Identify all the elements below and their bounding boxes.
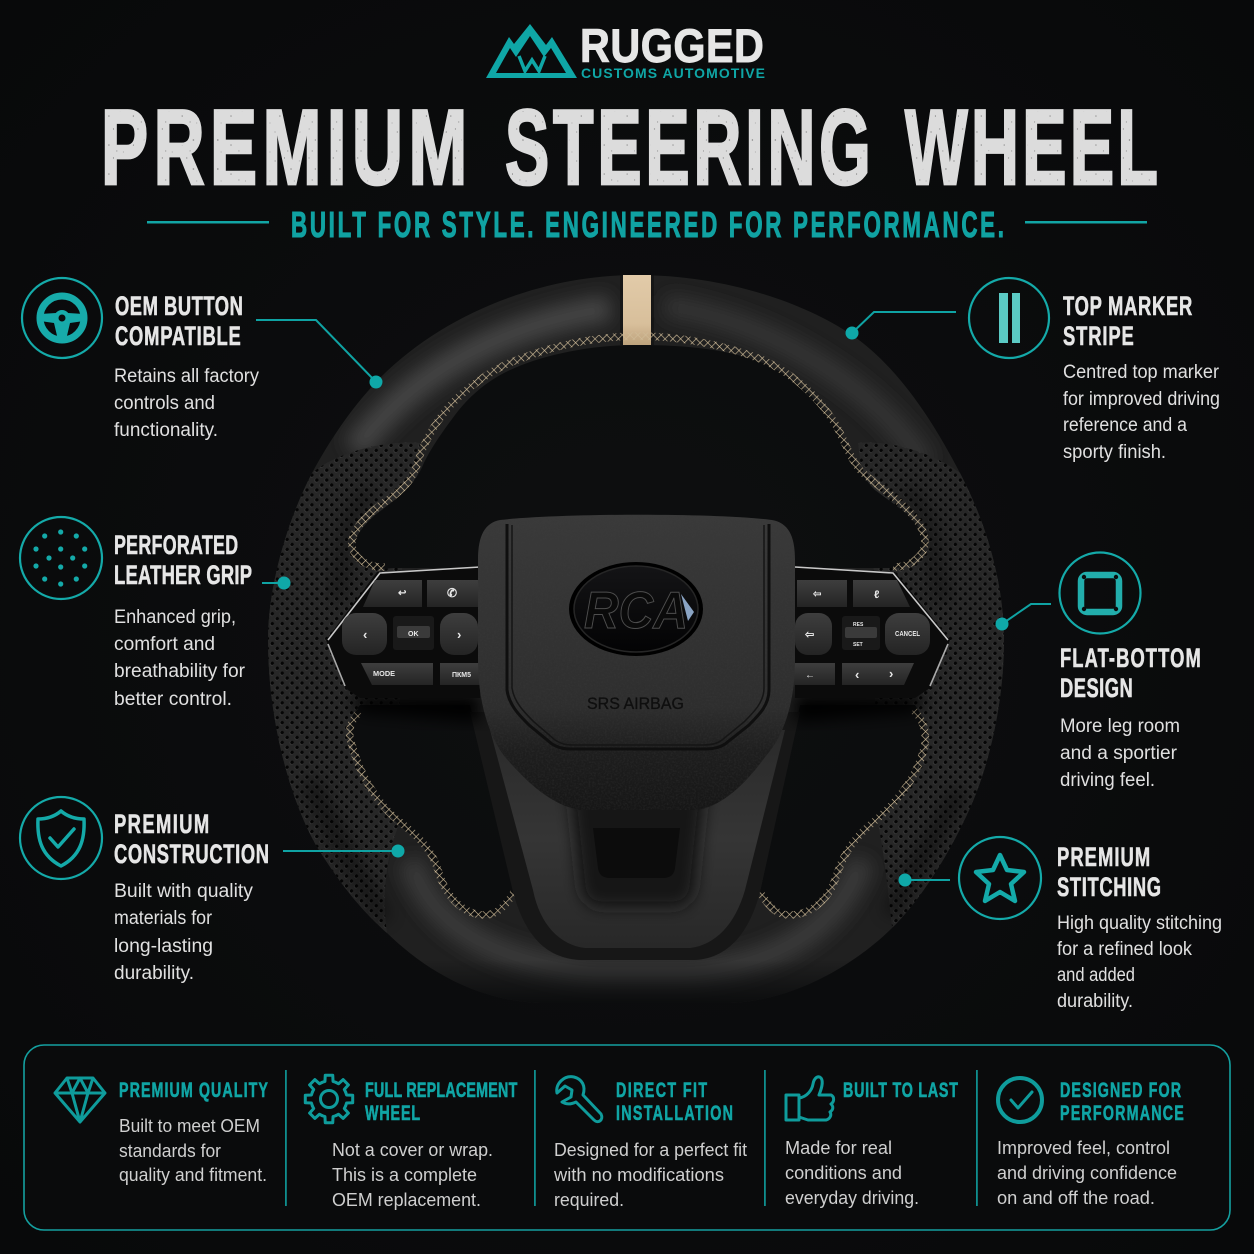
description: Not a cover or wrap. <box>332 1139 493 1160</box>
icon: flat-bottom square <box>1060 552 1140 634</box>
right button pod: RES <box>853 622 864 628</box>
description: on and off the road. <box>997 1187 1155 1208</box>
description <box>119 1115 267 1185</box>
heading: TOP MARKER <box>1063 290 1192 321</box>
benefit: full replacement wheel <box>305 1075 517 1210</box>
benefit: designed for performance <box>997 1078 1184 1208</box>
callout: OEM button compatible <box>22 278 382 441</box>
heading: PERFORMANCE <box>1060 1101 1184 1125</box>
right button pod: CANCEL <box>895 631 921 638</box>
description: Built with quality <box>114 881 254 902</box>
heading: PERFORATED <box>114 529 238 560</box>
heading: BUILT TO LAST <box>843 1078 958 1102</box>
heading: FLAT-BOTTOM <box>1060 642 1201 673</box>
heading <box>1060 1078 1184 1125</box>
description <box>1060 716 1180 791</box>
heading: DESIGNED FOR <box>1060 1078 1181 1102</box>
description: durability. <box>1057 991 1133 1012</box>
icon: wrench <box>557 1077 602 1122</box>
description: breathability for <box>114 661 246 682</box>
SRS airbag marking: SRS AIRBAG <box>587 694 684 713</box>
callout: premium stitching <box>898 837 1222 1012</box>
description: This is a complete <box>332 1164 477 1185</box>
description <box>332 1139 493 1210</box>
rim leather shading <box>250 306 1020 1007</box>
perforated right grip <box>859 442 1004 926</box>
description: conditions and <box>785 1162 902 1183</box>
description <box>114 881 254 984</box>
heading <box>1057 841 1161 902</box>
heading: PREMIUM QUALITY <box>119 1078 268 1102</box>
benefit: premium quality <box>55 1078 268 1185</box>
heading: STITCHING <box>1057 871 1161 902</box>
heading: FULL REPLACEMENT <box>365 1078 517 1102</box>
right button pod: › <box>889 666 893 681</box>
logo: Rugged Customs Automotive: RUGGED <box>580 21 764 73</box>
heading: CONSTRUCTION <box>114 838 269 869</box>
description: Retains all factory <box>114 366 259 387</box>
left button pod <box>326 566 481 722</box>
stitching <box>350 336 925 915</box>
description: Made for real <box>785 1137 892 1158</box>
logo: Rugged Customs Automotive: CUSTOMS AUTOMOTIVE <box>581 65 765 81</box>
emblem <box>569 562 703 656</box>
heading <box>1063 290 1192 351</box>
right button pod: ℓ <box>874 589 879 601</box>
icon: thumbs up <box>786 1077 834 1120</box>
callout: flat-bottom design <box>996 552 1201 791</box>
icon: diamond <box>55 1078 105 1122</box>
left button pod: ПКМ5 <box>452 672 471 679</box>
heading <box>114 808 269 869</box>
leader line <box>262 576 290 590</box>
description: reference and a <box>1063 415 1187 436</box>
subtitle: BUILT FOR STYLE. ENGINEERED FOR PERFORMANCE. <box>291 206 1004 245</box>
heading: DESIGN <box>1060 672 1133 703</box>
logo: Rugged Customs Automotive <box>486 21 765 81</box>
description: materials for <box>114 908 213 929</box>
description: required. <box>554 1189 624 1210</box>
description: driving feel. <box>1060 770 1155 791</box>
left button pod: › <box>457 627 461 642</box>
title: STEERING <box>505 87 871 207</box>
title: WHEEL <box>905 87 1158 207</box>
left button pod: ‹ <box>363 627 367 642</box>
description: High quality stitching <box>1057 913 1222 934</box>
description <box>1063 362 1220 463</box>
description: functionality. <box>114 420 218 441</box>
left button pod: MODE <box>373 671 395 678</box>
icon: check circle <box>998 1078 1042 1122</box>
heading <box>616 1078 733 1125</box>
title: PREMIUM <box>101 88 467 208</box>
description: everyday driving. <box>785 1187 919 1208</box>
right button pod: SET <box>853 642 863 648</box>
description: More leg room <box>1060 716 1180 737</box>
icon: star <box>959 837 1041 919</box>
description <box>114 607 246 710</box>
heading <box>115 290 243 351</box>
right button pod: ← <box>805 670 815 681</box>
description: comfort and <box>114 634 215 655</box>
heading: INSTALLATION <box>616 1101 733 1125</box>
heading: WHEEL <box>365 1101 420 1125</box>
description: and driving confidence <box>997 1162 1177 1183</box>
heading: PREMIUM <box>114 808 209 839</box>
icon: double stripe <box>969 278 1049 358</box>
description: for improved driving <box>1063 389 1220 410</box>
benefit: built to last <box>785 1077 958 1208</box>
heading: STRIPE <box>1063 320 1134 351</box>
leader line <box>256 320 382 388</box>
left button pod: ✆ <box>447 586 457 600</box>
description <box>997 1137 1177 1208</box>
description <box>553 1139 747 1210</box>
description: sporty finish. <box>1063 442 1166 463</box>
right button pod: ⇦ <box>812 589 822 600</box>
leader line <box>898 874 950 886</box>
heading: COMPATIBLE <box>115 320 241 351</box>
description: long-lasting <box>114 936 213 957</box>
callout: perforated leather grip <box>20 517 290 710</box>
heading: PREMIUM <box>1057 841 1150 872</box>
steering wheel <box>250 275 1020 1007</box>
heading <box>114 529 252 590</box>
emblem: RCA <box>584 582 688 640</box>
wheel rim <box>268 275 1004 1003</box>
perforated left grip <box>268 442 420 933</box>
description <box>1057 913 1222 1012</box>
description: Centred top marker <box>1063 362 1220 383</box>
left button pod: ↩ <box>398 588 407 599</box>
icon: perforation dots <box>20 517 102 599</box>
description <box>114 366 259 441</box>
bottom benefits panel <box>24 1045 1230 1230</box>
callout: premium construction <box>20 797 404 984</box>
heading <box>1060 642 1201 703</box>
benefit: direct fit installation <box>553 1077 747 1210</box>
heading: DIRECT FIT <box>616 1078 707 1102</box>
icon: shield <box>20 797 102 879</box>
description: and a sportier <box>1060 743 1178 764</box>
description: better control. <box>114 689 232 710</box>
description <box>785 1137 919 1208</box>
description: Enhanced grip, <box>114 607 236 628</box>
description: durability. <box>114 963 194 984</box>
right button pod: ⇦ <box>804 629 814 641</box>
description: for a refined look <box>1057 939 1192 960</box>
description: with no modifications <box>553 1164 724 1185</box>
description: OEM replacement. <box>332 1189 481 1210</box>
icon: gear <box>305 1075 353 1123</box>
description: standards for <box>119 1140 221 1161</box>
right button pod: ‹ <box>855 667 859 682</box>
description: controls and <box>114 393 215 414</box>
right button pod <box>791 566 950 722</box>
description: and added <box>1057 965 1135 986</box>
description: Built to meet OEM <box>119 1115 260 1136</box>
top marker stripe <box>620 275 654 345</box>
callout: top marker stripe <box>846 278 1220 463</box>
leader line <box>283 844 404 858</box>
icon: steering wheel <box>22 278 102 358</box>
title <box>101 87 1158 208</box>
description: Improved feel, control <box>997 1137 1170 1158</box>
leader line <box>846 312 956 340</box>
heading <box>365 1078 517 1125</box>
lower spoke <box>470 712 800 960</box>
leader line <box>996 604 1051 630</box>
left button pod: OK <box>408 631 418 638</box>
description: quality and fitment. <box>119 1164 267 1185</box>
heading: LEATHER GRIP <box>114 559 252 590</box>
description: Designed for a perfect fit <box>554 1139 747 1160</box>
airbag hub <box>470 510 805 815</box>
heading: OEM BUTTON <box>115 290 243 321</box>
